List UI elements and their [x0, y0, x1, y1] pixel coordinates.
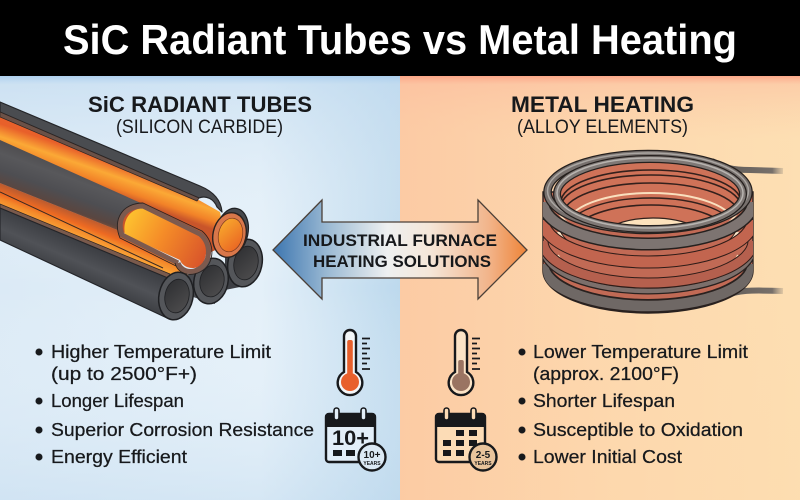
badge: 10+ years: 10+: [364, 450, 381, 461]
badge: 2-5 years: [470, 444, 496, 470]
rear lower tube end: [223, 236, 267, 290]
heading: metal heating: METAL HEATING: [511, 92, 694, 117]
SiC benefits list: Superior Corrosion Resistance: [51, 419, 314, 440]
coil body: [543, 192, 753, 313]
lower band divider: [0, 192, 163, 268]
SiC benefits list: Longer Lifespan: [51, 390, 184, 411]
left panel background: [0, 76, 400, 500]
icon: low temperature thermometer: [449, 330, 480, 395]
arrow label: [303, 231, 497, 271]
badge: 2-5 years: 2-5: [476, 450, 491, 461]
heading: metal heating: (ALLOY ELEMENTS): [517, 117, 688, 138]
SiC benefits list: Energy Efficient: [51, 446, 187, 467]
SiC benefits list: [36, 341, 314, 467]
glowing interior lower band: [0, 183, 196, 285]
arrow label: HEATING SOLUTIONS: [313, 252, 491, 271]
icon: calendar 10+ years: [325, 408, 386, 470]
illustration: SiC tube bundle: [0, 102, 267, 323]
metal heating drawbacks list: Susceptible to Oxidation: [533, 419, 743, 440]
front lower tube end: [154, 269, 198, 323]
top coil rings: [548, 153, 748, 230]
heading: SiC radiant tubes: [88, 92, 312, 138]
metal heating drawbacks list: Lower Temperature Limit: [533, 341, 748, 362]
metal heating drawbacks list: Shorter Lifespan: [533, 390, 675, 411]
top tube cut wall: [0, 102, 222, 212]
metal heating drawbacks list: Lower Initial Cost: [533, 446, 682, 467]
central double arrow: [273, 200, 527, 299]
right panel background: [400, 76, 800, 500]
rear open tube end, glowing: [209, 205, 253, 260]
front lower tube wall: [0, 204, 170, 279]
glowing interior upper band: [0, 117, 226, 262]
coil centre opening: [618, 217, 686, 225]
illustration: metal heating coil: [543, 153, 783, 313]
front lower tube body: [0, 208, 178, 318]
badge: 2-5 years: YEARS: [474, 461, 492, 467]
centre tube outer body: [0, 140, 143, 231]
title bar: [0, 0, 800, 76]
arrow label: INDUSTRIAL FURNACE: [303, 231, 497, 250]
metal heating drawbacks list: [519, 341, 748, 467]
centre tube cut wall: [120, 206, 209, 271]
title: SiC Radiant Tubes vs Metal Heating: [63, 16, 737, 63]
SiC benefits list: Higher Temperature Limit: [51, 341, 271, 362]
middle lower tube end: [188, 255, 232, 307]
lower lead wire: [725, 291, 783, 296]
icon: calendar 2-5 years: [435, 408, 496, 470]
centre tube glowing interior: [124, 208, 206, 268]
upper lead wire: [712, 161, 783, 171]
badge: 10+ years: [358, 444, 386, 470]
SiC benefits list: (up to 2500°F+): [51, 363, 197, 384]
heading: SiC radiant tubes: SiC RADIANT TUBES: [88, 92, 312, 117]
heading: SiC radiant tubes: (SILICON CARBIDE): [116, 117, 283, 138]
badge: 10+ years: YEARS: [363, 461, 381, 467]
coil interior wall: [559, 162, 743, 228]
icon: high temperature thermometer: [338, 330, 370, 395]
side strands: [543, 202, 753, 306]
heading: metal heating: [511, 92, 694, 138]
metal heating drawbacks list: (approx. 2100°F): [533, 363, 679, 384]
icon: calendar 10+ years: 10+: [332, 427, 369, 450]
